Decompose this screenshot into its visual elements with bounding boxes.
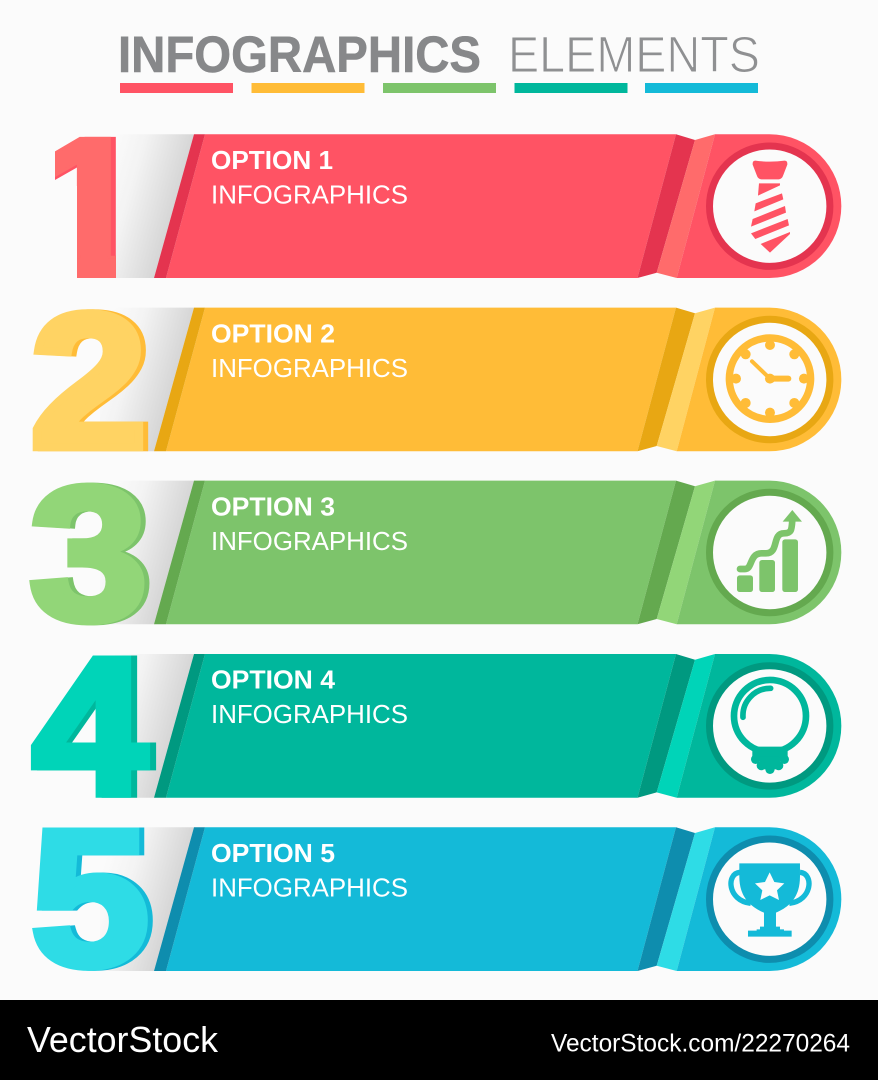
heading: option 4: OPTION 4 — [211, 667, 336, 695]
number 4: 4 — [32, 617, 147, 835]
text: infographics 4: INFOGRAPHICS — [211, 701, 408, 729]
number 3: 3 — [29, 447, 148, 660]
panel: option 2 — [30, 273, 841, 488]
number 5: 5 — [36, 790, 154, 1007]
number 1: 1 — [26, 95, 151, 322]
title: INFOGRAPHICS — [118, 26, 481, 83]
panel: option 4 — [32, 617, 841, 835]
icon: clock — [729, 338, 811, 419]
title colour bars — [120, 83, 758, 93]
text: infographics 2: INFOGRAPHICS — [211, 355, 408, 383]
footer bar: VectorStock — [27, 1019, 219, 1060]
panel: option 5 — [31, 790, 841, 1007]
icon: growth chart — [737, 510, 802, 592]
text: infographics 5: INFOGRAPHICS — [211, 874, 408, 902]
icon: light bulb — [734, 680, 806, 774]
panel: option 1 — [55, 134, 842, 278]
heading: option 5: OPTION 5 — [211, 840, 335, 868]
number 4: 4 — [38, 617, 153, 835]
title — [118, 26, 760, 83]
heading: option 1: OPTION 1 — [211, 147, 333, 175]
panel: option 3 — [29, 447, 841, 660]
number 5: 5 — [31, 790, 149, 1007]
number 1: 1 — [31, 95, 156, 322]
number 3: 3 — [34, 447, 153, 660]
footer bar: VectorStock.com/22270264 — [551, 1030, 850, 1058]
icon: necktie — [751, 161, 790, 253]
number 1 — [55, 136, 116, 278]
heading: option 2: OPTION 2 — [211, 320, 335, 348]
heading: option 3: OPTION 3 — [211, 493, 335, 521]
text: infographics 1: INFOGRAPHICS — [211, 182, 408, 210]
number 2: 2 — [35, 273, 152, 488]
footer bar — [0, 1000, 878, 1080]
title: ELEMENTS — [508, 26, 760, 83]
icon: trophy — [731, 863, 809, 937]
number 2: 2 — [30, 273, 147, 488]
text: infographics 3: INFOGRAPHICS — [211, 528, 408, 556]
